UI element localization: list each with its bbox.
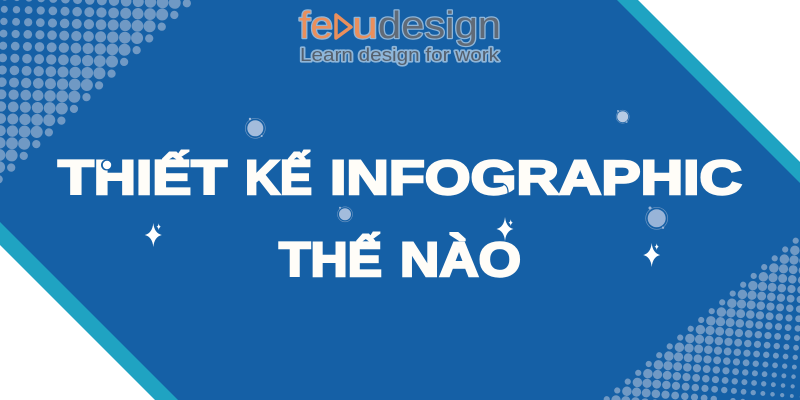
title line 1: KẾ	[245, 151, 312, 205]
sparkle: centre	[496, 217, 514, 241]
title line 2	[279, 233, 521, 287]
logo icon: play triangle	[336, 15, 351, 38]
logo wordmark: fe: fe	[299, 5, 333, 47]
top-right corner: teal band and white triangle	[617, 0, 800, 183]
title line 1: THIẾT	[58, 151, 227, 205]
halftone dots: top left	[0, 0, 187, 197]
bottom-left corner: teal band and white triangle	[0, 222, 178, 400]
logo tagline: Learn design for work	[300, 45, 500, 65]
speck on title letter H	[101, 160, 112, 170]
title line 1	[58, 151, 742, 205]
notch in title letter G	[498, 184, 508, 195]
bubble: top right	[616, 110, 629, 123]
bubble: centre	[338, 207, 352, 222]
title line 2: NÀO	[400, 233, 521, 287]
title	[58, 151, 742, 287]
bubble: upper left	[245, 118, 265, 138]
sparkle: right	[643, 243, 660, 267]
logo	[299, 5, 501, 65]
halftone dots: bottom right	[607, 177, 800, 400]
sparkle: left	[145, 223, 162, 247]
title line 1: INFOGRAPHIC	[330, 152, 742, 205]
title line 2: THẾ	[279, 233, 382, 287]
logo wordmark: design: design	[378, 5, 501, 47]
logo wordmark: u: u	[352, 5, 378, 47]
bubble: right	[646, 206, 668, 229]
